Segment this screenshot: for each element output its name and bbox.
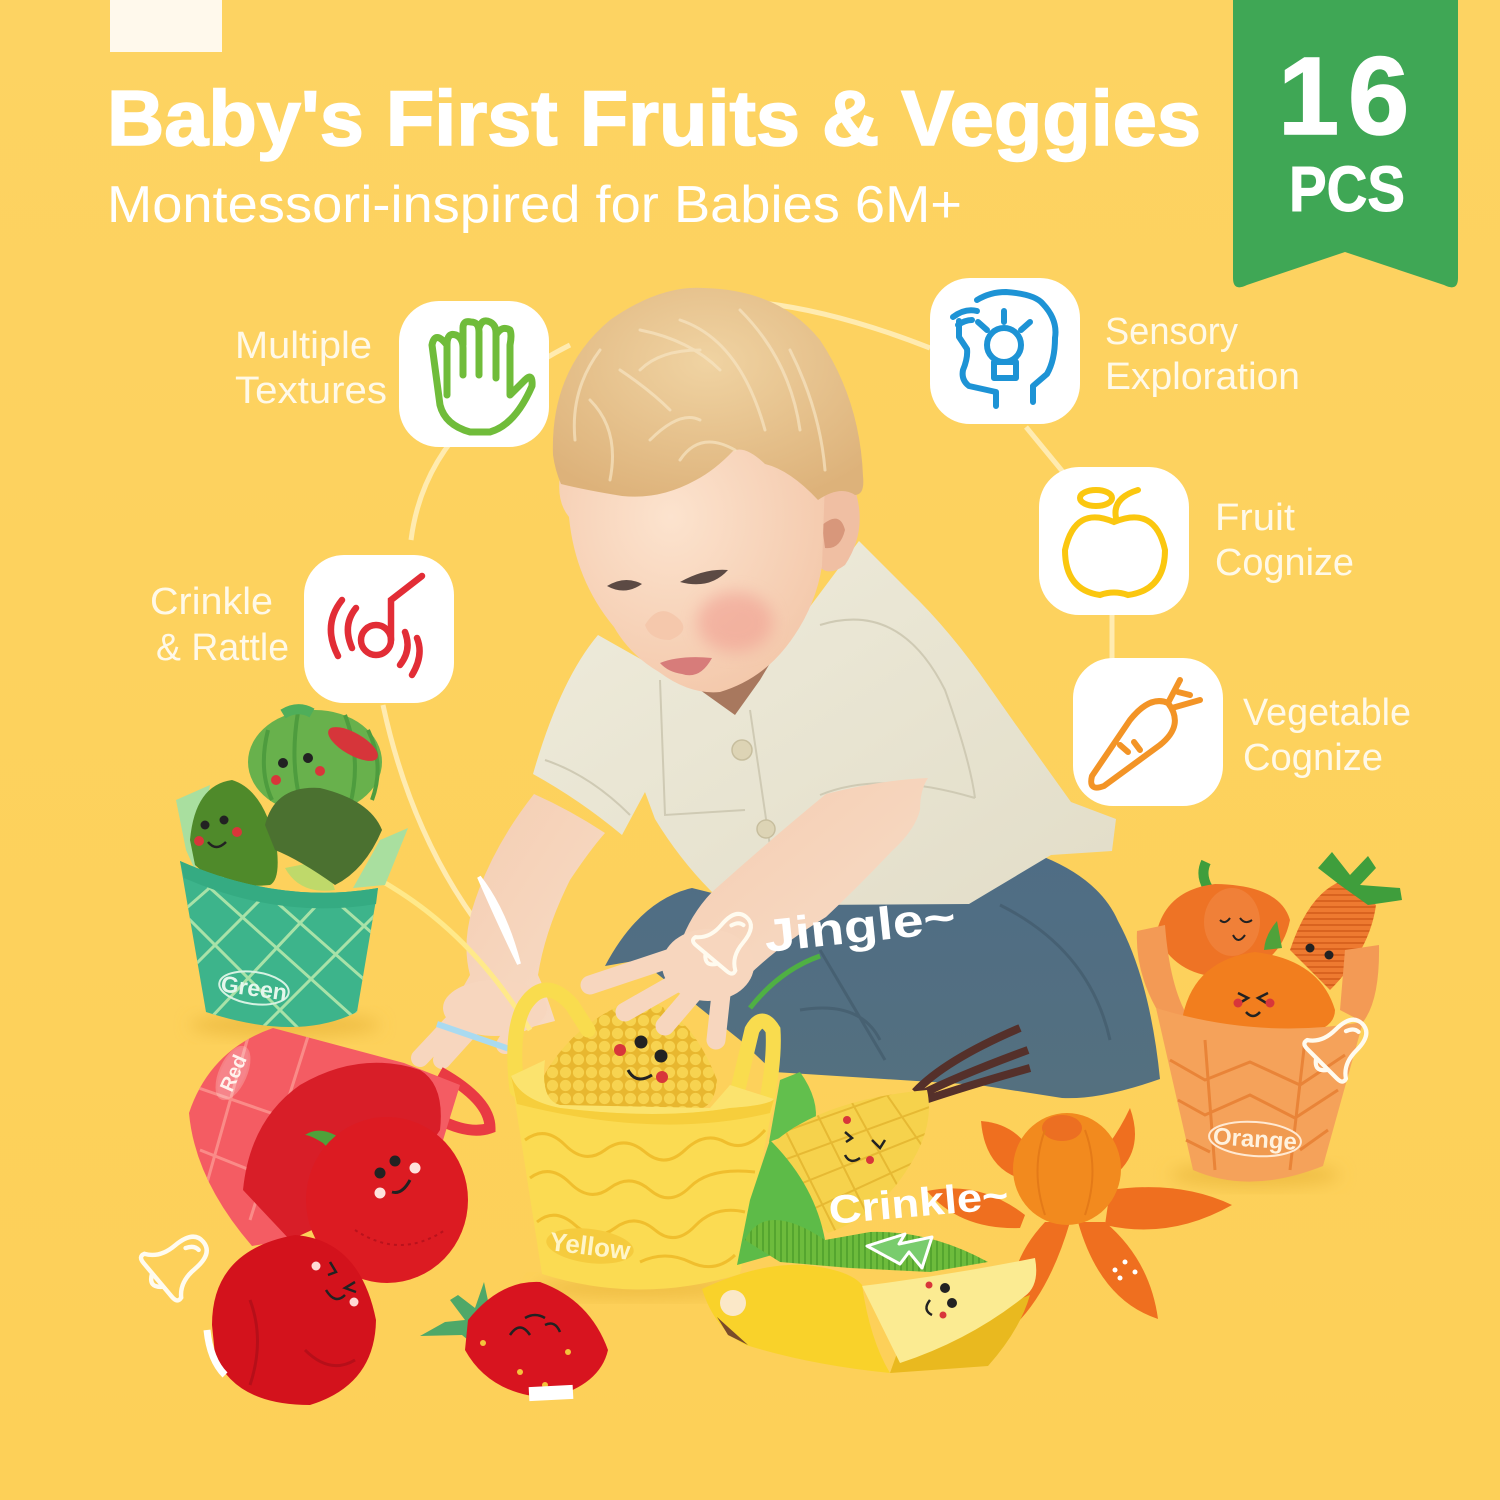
basket label: Yellow [548, 1226, 633, 1266]
flesh [862, 1258, 1036, 1363]
shadow swooshes [378, 877, 820, 1053]
label: Textures [235, 370, 387, 412]
basket rim [180, 861, 378, 908]
badge: 16 pcs: 6 [1348, 35, 1409, 158]
shirt seams [545, 620, 975, 880]
basket body [511, 1076, 774, 1290]
baby shirt [533, 541, 1116, 905]
corduroy husk [745, 1220, 988, 1272]
handles [515, 990, 773, 1110]
pineapple toy [536, 998, 717, 1109]
right lining leaf [353, 828, 408, 888]
basket label: Red [216, 1052, 252, 1095]
label: Vegetable [1243, 692, 1411, 734]
baby legs [605, 857, 1160, 1098]
badge: 16 pcs: 1 [1278, 35, 1339, 158]
feature: multiple textures [235, 301, 549, 447]
basket label [210, 1042, 256, 1104]
basket body [1156, 1008, 1363, 1182]
corn toy [737, 1028, 1030, 1272]
baby nose [645, 611, 683, 640]
icon: music note [304, 555, 454, 703]
label: Fruit [1215, 497, 1295, 539]
baby cheek [697, 592, 773, 652]
icon: apple [1039, 467, 1189, 615]
feature: vegetable cognize [1073, 658, 1411, 806]
back leaf [769, 1072, 816, 1142]
icon: bell orange basket [1298, 1004, 1382, 1088]
raspberry toy [207, 1235, 376, 1405]
icon: bell jingle [687, 900, 767, 980]
front leaf [737, 1140, 825, 1265]
label: Cognize [1243, 737, 1383, 779]
baby face [559, 400, 825, 692]
crinkle icon [867, 1234, 932, 1268]
feature: fruit cognize [1039, 467, 1354, 615]
cob [774, 1090, 929, 1233]
baby body [420, 288, 1160, 1098]
icon: carrot [1073, 658, 1223, 806]
title: Baby's First Fruits & Veggies [107, 74, 1201, 162]
orange toy [1183, 921, 1335, 1035]
inner basket [511, 1060, 774, 1131]
badge: 16 pcs [1233, 0, 1458, 287]
basket body [180, 861, 378, 1027]
subtitle: Montessori-inspired for Babies 6M+ [107, 176, 962, 234]
basket outer [189, 1028, 460, 1246]
feature: sensory exploration [930, 278, 1300, 424]
watermelon [248, 709, 383, 814]
under peel [890, 1295, 1030, 1373]
feature ring [383, 300, 1112, 920]
baby eyes [607, 570, 728, 591]
label: Sensory [1105, 311, 1238, 353]
baby neck [700, 630, 790, 715]
icon: hand [399, 301, 549, 447]
basket back flaps [1137, 925, 1379, 1022]
baby right arm and hand [420, 794, 605, 1060]
white tab [110, 0, 222, 52]
shirt buttons [732, 740, 775, 838]
icon: head with bulb [930, 278, 1080, 424]
basket label: Green [219, 971, 289, 1005]
tomato toy [305, 1117, 468, 1283]
hair strands [574, 310, 825, 480]
feature: crinkle and rattle [150, 555, 454, 703]
baby hair [553, 288, 863, 500]
label: crinkle: Crinkle~ [827, 1173, 1010, 1233]
strawberry toy [420, 1282, 608, 1401]
label: Multiple [235, 325, 372, 367]
baby inner ear [822, 519, 845, 548]
basket shadow [535, 1278, 745, 1298]
banana toy [702, 1258, 1036, 1373]
red basket [189, 1028, 490, 1246]
pumpkin toy [1156, 862, 1290, 977]
label: Crinkle [150, 581, 273, 623]
basket lattice [188, 876, 374, 1027]
label: Exploration [1105, 356, 1300, 398]
baby mouth [660, 657, 712, 675]
basket inner [243, 1063, 441, 1240]
basket shadow [1170, 1163, 1340, 1187]
basket shadow [190, 1013, 380, 1037]
label: Cognize [1215, 542, 1354, 584]
basket label: Orange [1212, 1123, 1298, 1156]
label: & Rattle [156, 627, 289, 669]
baby left arm and hand [590, 778, 928, 1040]
carrot toy [1290, 852, 1402, 990]
avocado [190, 780, 278, 886]
baby ear [815, 484, 860, 571]
orange basket with toys [1137, 852, 1402, 1187]
yellow basket [511, 990, 774, 1298]
jeans folds [800, 905, 1110, 1060]
icon: bell left [134, 1220, 222, 1306]
badge: 16 pcs: PCS [1289, 153, 1405, 225]
left lining leaf [176, 785, 210, 870]
basket handle [440, 1072, 490, 1130]
label: jingle: Jingle~ [762, 890, 958, 962]
basket rim [511, 1076, 774, 1125]
peel [702, 1265, 890, 1373]
orange toy with peel [927, 1108, 1232, 1324]
silk [915, 1028, 1030, 1100]
green basket with toys [176, 704, 408, 1040]
broccoli [265, 788, 382, 891]
